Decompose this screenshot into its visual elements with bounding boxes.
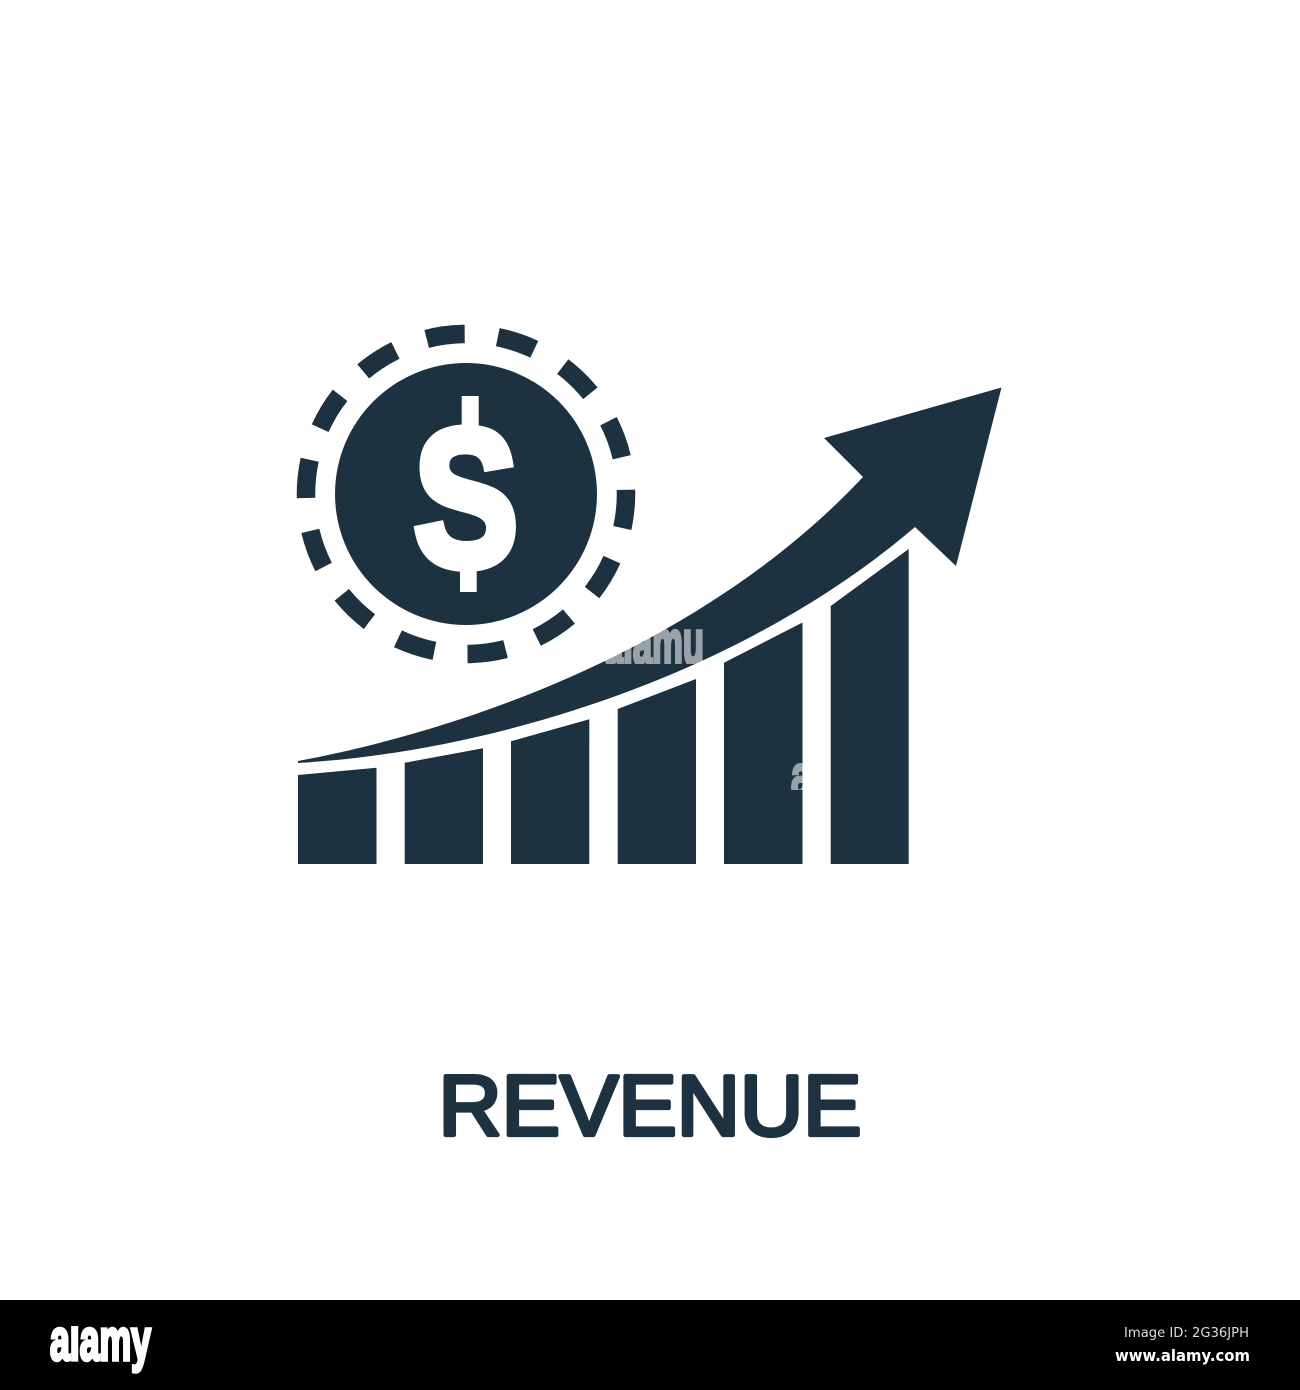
coin disc [335,363,597,625]
footer logo: alamy: alamy [50,1308,151,1373]
footer bar [0,1300,1300,1390]
watermark: on bar: alamy [791,744,891,809]
title: REVENUE: REVENUE [438,1059,862,1154]
icon: dollar coin with dashed ring [302,330,630,658]
footer image id: Image ID: 2G36JPH [1124,1325,1249,1341]
dollar sign: S [414,390,518,607]
bar chart: six rising bars [298,549,909,864]
arrow: rising growth curve [298,388,1002,763]
infographic canvas [0,324,1300,1390]
watermark: on arrow: alamu [604,609,704,678]
dashed ring [302,330,630,658]
footer url: www.alamy.com [1115,1346,1250,1365]
